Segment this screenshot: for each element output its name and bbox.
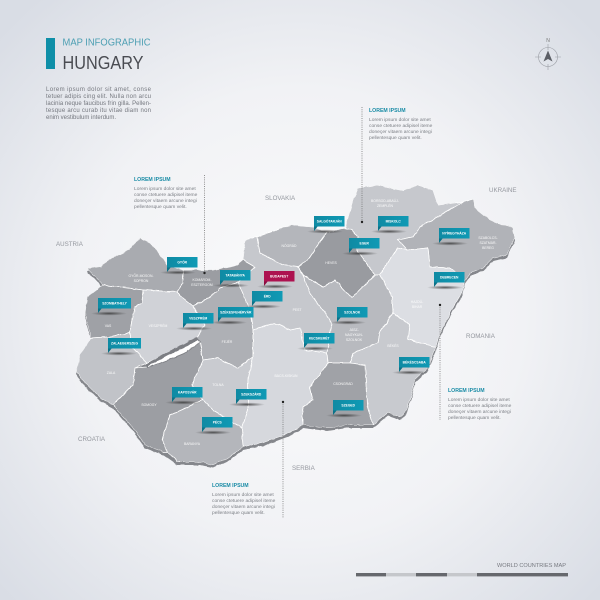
- callout text: bottom: [212, 483, 276, 516]
- county labels: FEJÉR: [222, 339, 233, 344]
- county labels: SZOLNOK: [346, 338, 363, 342]
- tag: Debrecen: DEBRECEN: [440, 275, 459, 279]
- callout line: Borsod: [361, 107, 363, 223]
- county: Baranya: [162, 400, 243, 465]
- tag: Szombathely: [91, 298, 131, 316]
- county labels: ZALA: [107, 371, 116, 375]
- county labels: TOLNA: [212, 383, 224, 387]
- icon: compass: [535, 38, 561, 70]
- county labels: ESZTERGOM: [191, 283, 213, 287]
- county: Csongrád: [303, 363, 373, 428]
- county: Jász-Nagykun-Szolnok: [303, 275, 393, 363]
- county: Szabolcs-Szatmár-Bereg: [398, 199, 515, 280]
- callout text: right: Lorem ipsum dolor site amet: [448, 397, 510, 403]
- lake Balaton: [146, 337, 201, 368]
- county labels: ZEMPLÉN: [377, 203, 394, 208]
- county labels: SOPRON: [134, 279, 149, 283]
- icon: compass: N: [546, 38, 550, 44]
- intro text block: tesque arcu curab itu vitae diam non: [46, 108, 151, 114]
- county: Komárom-Esztergom: [177, 260, 255, 306]
- callout text: left: conse ctetuere adipisel iteme: [134, 192, 198, 198]
- county labels: JÁSZ-: [349, 328, 359, 332]
- county: Győr-Moson-Sopron: [87, 238, 183, 292]
- county: Bács-Kiskun: [242, 323, 328, 447]
- tag: Szolnok: [330, 307, 368, 324]
- tag: Pécs: [195, 417, 232, 434]
- country labels: ROMANIA: [466, 333, 496, 340]
- footer label: WORLD COUNTRIES MAP: [497, 563, 566, 569]
- tag: Zalaegerszeg: [101, 338, 141, 356]
- map of Hungary: [76, 185, 515, 468]
- county labels: [105, 198, 498, 446]
- county: Veszprém: [130, 290, 205, 363]
- callout text: top right: [369, 108, 433, 141]
- tag: Szekszárd: [229, 389, 266, 406]
- callout text: left: Lorem ipsum dolor site amet: [134, 186, 196, 192]
- county labels: VAS: [105, 324, 112, 328]
- county: Pest: [238, 237, 332, 353]
- county labels: BÉKÉS: [387, 343, 399, 348]
- county labels: BIHAR: [412, 305, 423, 309]
- title: Hungary: HUNGARY: [62, 53, 144, 73]
- intro text block: [46, 87, 152, 121]
- tag: Kecskemét: KECSKEMÉT: [309, 335, 330, 340]
- tag: Veszprém: [176, 313, 214, 330]
- callout text: top right: conse ctetuere adipisel iteme: [369, 123, 433, 129]
- counties: [76, 185, 515, 465]
- county: Zala: [76, 333, 147, 405]
- callout text: right: conse ctetuere adipisel iteme: [448, 403, 512, 409]
- callout text: top right: pellentesque quam velit.: [369, 135, 422, 141]
- tag: Debrecen: [427, 272, 464, 290]
- tag: Zalaegerszeg: ZALAEGERSZEG: [111, 341, 138, 345]
- tag: Nyíregyháza: NYÍREGYHÁZA: [442, 230, 467, 235]
- callout text: right: LOREM IPSUM: [448, 388, 485, 394]
- tag: Pécs: PÉCS: [213, 419, 222, 424]
- tag: Győr: GYŐR: [177, 259, 188, 264]
- tag: Székesfehérvár: SZÉKESFEHÉRVÁR: [220, 309, 252, 314]
- callout text: top right: Lorem ipsum dolor site amet: [369, 117, 431, 123]
- county labels: SZATMÁR-: [479, 241, 497, 245]
- tag: Tatabánya: [213, 270, 250, 288]
- county labels: SZABOLCS-: [478, 236, 498, 240]
- tag: Tatabánya: TATABÁNYA: [225, 272, 246, 277]
- tag: Szekszárd: SZEKSZÁRD: [241, 391, 262, 396]
- tag: Szolnok: SZOLNOK: [344, 310, 361, 314]
- intro text block: Lorem ipsum dolor sit amet, conse: [46, 87, 152, 93]
- callout text: bottom: conse ctetuere adipisel iteme: [212, 498, 276, 504]
- callout text: bottom: doneçer vitaem arcune integi: [212, 504, 275, 510]
- country labels: CROATIA: [78, 436, 106, 443]
- country labels: SLOVAKIA: [265, 195, 296, 202]
- callout line: Bács-Kiskun: [282, 401, 284, 518]
- county labels: NAGYKUN-: [345, 333, 363, 337]
- county labels: CSONGRÁD: [333, 382, 353, 386]
- tag: Veszprém: VESZPRÉM: [189, 315, 208, 320]
- county: Fejér: [193, 282, 253, 368]
- callout text: right: pellentesque quam velit.: [448, 415, 501, 421]
- tag: Nyíregyháza: [432, 228, 470, 246]
- county labels: NÓGRÁD: [282, 243, 297, 248]
- callout text: top right: LOREM IPSUM: [369, 108, 406, 114]
- county labels: BEREG: [482, 246, 494, 250]
- tag: Szombathely: SZOMBATHELY: [102, 301, 128, 305]
- county labels: HEVES: [325, 261, 337, 265]
- callout text: right: [448, 388, 512, 421]
- callout text: left: doneçer vitaem arcune integi: [134, 198, 197, 204]
- callout text: left: LOREM IPSUM: [134, 177, 171, 183]
- callout line: Komárom: [203, 175, 206, 274]
- tag: Kecskemét: [297, 333, 334, 350]
- tag: Békéscsaba: [392, 357, 430, 374]
- callout text: bottom: Lorem ipsum dolor site amet: [212, 492, 274, 498]
- county labels: BARANYA: [184, 442, 201, 446]
- county labels: VESZPRÉM: [149, 323, 167, 328]
- callout text: left: [134, 177, 198, 210]
- tag: Miskolc: [371, 216, 408, 234]
- county: Tolna: [192, 357, 253, 428]
- title: map infographic: MAP INFOGRAPHIC: [62, 38, 150, 49]
- county labels: BÁCS-KISKUN: [274, 374, 298, 378]
- tag: Budapest: BUDAPEST: [270, 274, 288, 278]
- tag: Szeged: [326, 400, 364, 418]
- county: Vas: [85, 285, 143, 338]
- county: Heves: [298, 228, 375, 298]
- tag: Érd: ÉRD: [264, 293, 271, 298]
- title accent bar: [46, 38, 55, 69]
- tag: Székesfehérvár: [211, 307, 254, 324]
- map extrusion shadow: [76, 188, 515, 468]
- tag: Kaposvár: [165, 387, 202, 404]
- tag: Békéscsaba: BÉKÉSCSABA: [403, 359, 426, 364]
- county: Hajdú-Bihar: [380, 248, 465, 347]
- country labels: UKRAINE: [489, 187, 517, 194]
- tag: Budapest: [257, 271, 294, 288]
- intro text block: lacinia neque faucibus frin gilla. Pellen-: [46, 101, 151, 107]
- tag: Kaposvár: KAPOSVÁR: [178, 389, 197, 394]
- county labels: PEST: [293, 308, 301, 312]
- tag: Szeged: SZEGED: [341, 403, 356, 407]
- country labels: AUSTRIA: [56, 241, 84, 248]
- county labels: BORSOD-ABAÚJ-: [371, 198, 399, 203]
- callout text: right: doneçer vitaem arcune integi: [448, 409, 511, 415]
- county labels: GYŐR-MOSON-: [128, 273, 154, 278]
- tag: Salgótarján: [307, 216, 344, 234]
- county: Borsod-Abaúj-Zemplén: [345, 185, 463, 275]
- callout text: bottom: pellentesque quam velit.: [212, 510, 265, 516]
- intro text block: tetuer adipis cing elit. Nulla non arcu: [46, 94, 151, 100]
- tag: Érd: [245, 291, 282, 308]
- county: Somogy: [113, 342, 203, 452]
- footer scale bar: [356, 573, 568, 576]
- tag: Salgótarján: SALGÓTARJÁN: [317, 218, 342, 223]
- intro text block: enim vestibulum interdum.: [46, 115, 116, 121]
- callout text: top right: doneçer vitaem arcune integi: [369, 129, 432, 135]
- city tags: [91, 216, 470, 434]
- county: Nógrád: [257, 225, 327, 267]
- country labels: SERBIA: [292, 465, 316, 472]
- tag: Győr: [160, 257, 198, 274]
- county labels: KOMÁROM-: [192, 278, 212, 282]
- tag: Miskolc: MISKOLC: [386, 219, 401, 223]
- county labels: SOMOGY: [141, 403, 157, 407]
- callout line: Hajdú-Bihar: [439, 304, 441, 420]
- county: Békés: [350, 313, 436, 425]
- county labels: HAJDÚ-: [411, 299, 423, 304]
- country labels: [56, 187, 517, 472]
- tag: Eger: EGER: [360, 241, 369, 245]
- callout text: left: pellentesque quam velit.: [134, 204, 187, 210]
- tag: Eger: [342, 238, 380, 256]
- callout text: bottom: LOREM IPSUM: [212, 483, 249, 489]
